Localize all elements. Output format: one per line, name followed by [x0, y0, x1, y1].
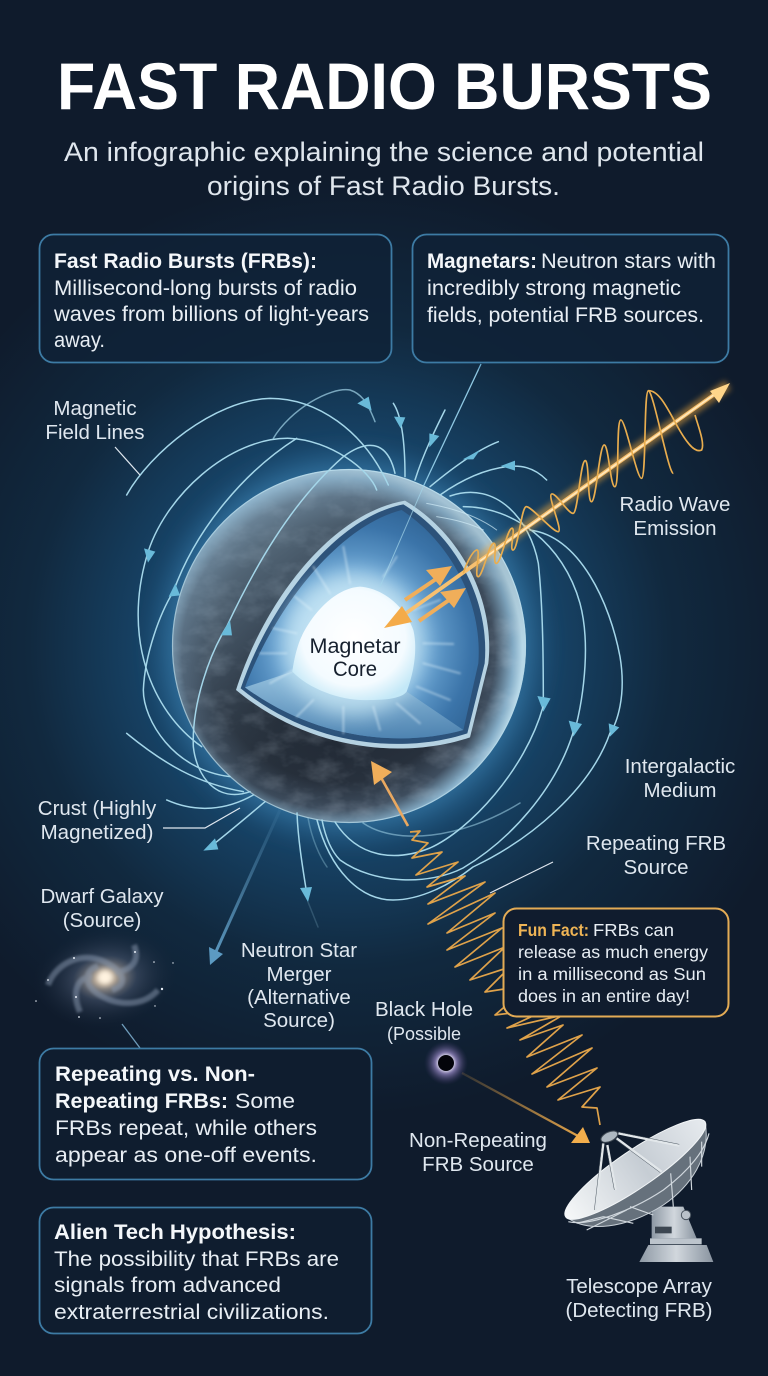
- icon: black hole: [424, 1041, 468, 1085]
- panel: repeating vs non-repeating: [40, 1048, 372, 1180]
- bowl lattice: [566, 1122, 706, 1226]
- label: magnetic field lines: [45, 397, 145, 444]
- panel text: Alien Tech Hypothesis:: [54, 1220, 296, 1244]
- arrow to crust: [378, 772, 408, 826]
- icon: dwarf galaxy: [27, 918, 183, 1038]
- label: telescope array: (Detecting FRB): [566, 1299, 712, 1322]
- lower arrowhead: [300, 887, 312, 902]
- beam arrowhead outer: [710, 383, 730, 403]
- arrow: black hole to telescope: [462, 1073, 590, 1143]
- label: telescope array: Telescope Array: [566, 1275, 713, 1298]
- label: non-repeating FRB source: [409, 1129, 547, 1176]
- label: radio wave emission: [620, 493, 730, 540]
- panel text: waves from billions of light-years: [53, 302, 369, 326]
- small arrowhead upper: [426, 566, 452, 586]
- panel text: Neutron stars with: [541, 249, 716, 273]
- mount: [639, 1207, 713, 1262]
- panel text: Fast Radio Bursts (FRBs):: [54, 249, 317, 273]
- label: repeating FRB source: Repeating FRB: [586, 832, 726, 855]
- label: intergalactic medium: Intergalactic: [625, 755, 735, 778]
- panel text: Magnetars:: [427, 249, 537, 273]
- sphere crust: [172, 469, 526, 823]
- small arrowhead lower: [440, 588, 466, 608]
- label: telescope array: [566, 1275, 713, 1322]
- label: crust: Magnetized): [41, 821, 153, 844]
- subtitle: An infographic explaining the science and potential: [64, 137, 704, 167]
- core label: Core: [333, 658, 377, 681]
- field line arrowheads: [144, 397, 619, 851]
- panel text: away.: [54, 328, 105, 352]
- panel text: signals from advanced: [54, 1273, 281, 1297]
- label: crust: Crust (Highly: [38, 797, 157, 820]
- label: intergalactic medium: Medium: [644, 779, 716, 802]
- small arrow upper: [405, 575, 442, 600]
- panel text: Repeating FRBs:: [55, 1089, 228, 1113]
- label: neutron star merger: [241, 939, 357, 1032]
- label: neutron star merger: Merger: [267, 963, 332, 986]
- label: intergalactic medium: [625, 755, 735, 802]
- panel: alien tech hypothesis: [40, 1208, 372, 1334]
- leader: galaxy to box: [122, 1024, 140, 1048]
- floor wedge: [245, 672, 463, 738]
- struts: [596, 1133, 679, 1210]
- panel: magnetars: [412, 234, 728, 362]
- arrowhead to crust: [371, 761, 392, 785]
- core label: Magnetar: [310, 635, 401, 658]
- label: neutron star merger: (Alternative: [247, 986, 351, 1009]
- panel text: FRBs can: [593, 920, 674, 940]
- panel: fast radio bursts: [40, 234, 392, 362]
- label: magnetic field lines: Magnetic: [53, 397, 137, 420]
- panel text: Fun Fact:: [518, 920, 589, 940]
- panel text: [518, 920, 708, 1006]
- leader: crust: [163, 808, 240, 828]
- repeating FRB wave: [371, 761, 600, 1125]
- panel text: The possibility that FRBs are: [54, 1247, 339, 1271]
- label: black hole: Black Hole: [375, 998, 473, 1021]
- beam: [395, 389, 722, 621]
- label: non-repeating FRB source: FRB Source: [422, 1153, 534, 1176]
- beam arrowhead inner: [384, 606, 412, 628]
- label: black hole: (Possible: [387, 1024, 461, 1044]
- helical wave: [463, 391, 703, 577]
- label: non-repeating FRB source: Non-Repeating: [409, 1129, 547, 1152]
- panel: fun fact: [504, 908, 728, 1016]
- label: repeating FRB source: Source: [624, 856, 688, 879]
- subtitle: origins of Fast Radio Bursts.: [207, 171, 560, 201]
- subtitle: [64, 137, 704, 201]
- dish face: [555, 1106, 716, 1232]
- beam glow: [470, 385, 728, 566]
- panel text: [53, 249, 369, 352]
- leader line: magnetars box to star: [423, 364, 481, 487]
- panel text: Repeating vs. Non-: [55, 1062, 255, 1086]
- leader: magnetic field lines: [115, 447, 140, 475]
- panel text: fields, potential FRB sources.: [427, 303, 704, 327]
- panel text: [54, 1220, 339, 1324]
- panel text: [427, 249, 716, 327]
- icon: telescope dish: [555, 1106, 716, 1262]
- title: FAST RADIO BURSTS: [57, 49, 712, 123]
- small arrow lower: [419, 598, 452, 621]
- label: dwarf galaxy: [40, 885, 164, 932]
- panel text: Millisecond-long bursts of radio: [54, 276, 357, 300]
- core: [292, 587, 415, 700]
- panel text: release as much energy: [518, 942, 708, 962]
- panel text: appear as one-off events.: [55, 1143, 317, 1167]
- cutaway interior: [236, 501, 489, 748]
- lower field line loops: [297, 707, 610, 927]
- label: radio wave emission: Emission: [633, 517, 717, 540]
- label: neutron star merger: Source): [263, 1009, 335, 1032]
- leader: repeating source: [490, 862, 553, 893]
- magnetar illustration: [163, 460, 535, 832]
- label: radio wave emission: Radio Wave: [620, 493, 730, 516]
- radio wave emission: [384, 383, 730, 628]
- core label: [310, 635, 401, 681]
- sphere glow: [163, 460, 535, 832]
- panel text: [55, 1062, 317, 1167]
- label: neutron star merger: Neutron Star: [241, 939, 357, 962]
- panel text: in a millisecond as Sun: [518, 964, 706, 984]
- neutron star merger arrow: [209, 810, 280, 965]
- panel text: incredibly strong magnetic: [427, 276, 681, 300]
- label: crust: [38, 797, 157, 844]
- label: dwarf galaxy: Dwarf Galaxy: [40, 885, 164, 908]
- label: black hole: [375, 998, 473, 1044]
- label: magnetic field lines: Field Lines: [45, 421, 145, 444]
- panel text: Some: [235, 1089, 295, 1113]
- feed: [599, 1129, 619, 1145]
- rays: [260, 547, 460, 733]
- panel text: FRBs repeat, while others: [55, 1116, 317, 1140]
- magnetic field lines: [127, 370, 622, 927]
- label: repeating FRB source: [586, 832, 726, 879]
- label: dwarf galaxy: (Source): [63, 909, 141, 932]
- panel text: does in an entire day!: [518, 986, 690, 1006]
- panel text: extraterrestrial civilizations.: [54, 1300, 329, 1324]
